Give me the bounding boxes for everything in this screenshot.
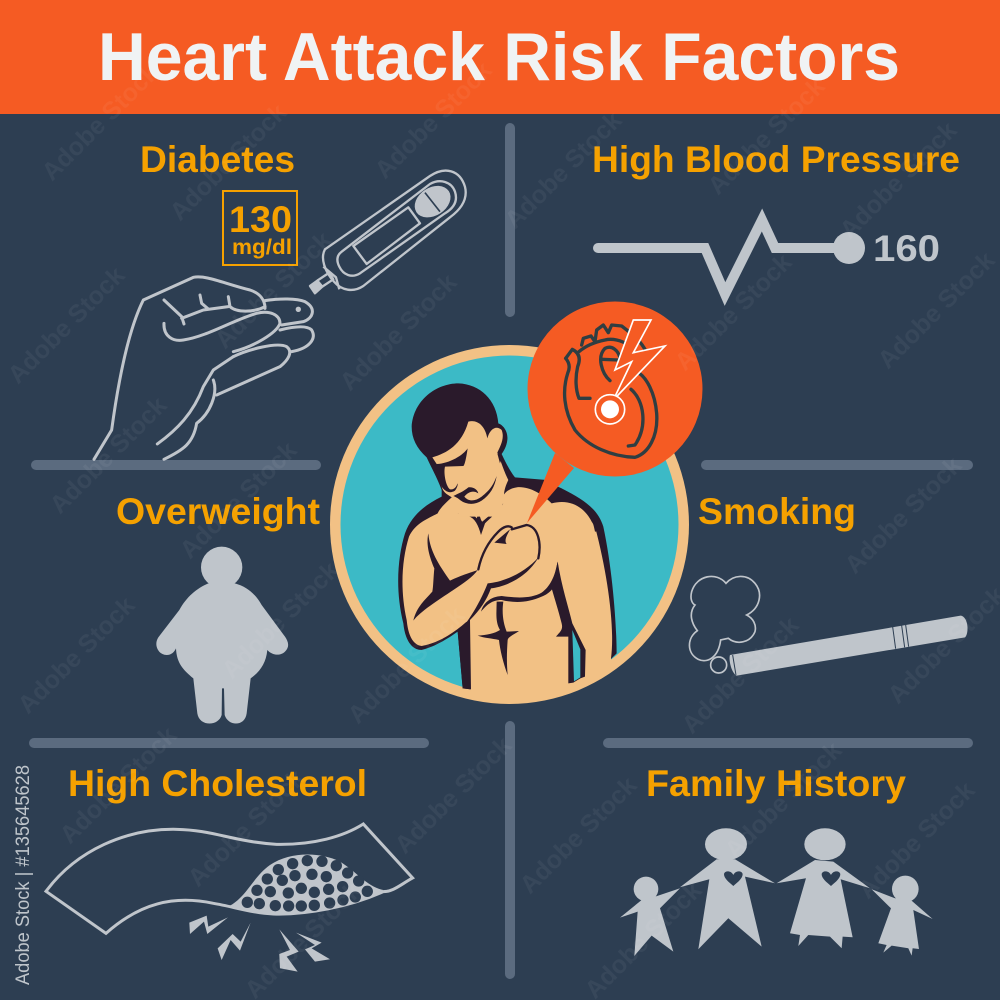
- shoulder notch: [592, 523, 596, 532]
- watermark pattern: Adobe Stock: [36, 58, 164, 186]
- icon: artery with plaque: [46, 824, 413, 972]
- heading: family history: Family History: [646, 763, 906, 804]
- watermark pattern: Adobe Stock: [342, 601, 470, 729]
- face profile: [432, 458, 458, 492]
- reading box: 130 mg/dl: mg/dl: [232, 236, 292, 259]
- icon: glucose meter: [310, 171, 466, 293]
- title banner: Heart Attack Risk Factors: [98, 19, 900, 95]
- forearm lower shadow: [458, 557, 539, 689]
- watermark pattern: Adobe Stock: [164, 98, 292, 226]
- watermark pattern: Adobe Stock: [872, 246, 1000, 374]
- watermark pattern: Adobe Stock: [54, 721, 182, 849]
- watermark pattern: Adobe Stock: [2, 261, 130, 389]
- watermark pattern: Adobe Stock: [499, 106, 627, 234]
- watermark pattern: Adobe Stock: [389, 731, 517, 859]
- right flank shadow: [552, 562, 586, 683]
- gap between torso and arm: [572, 630, 580, 681]
- chest mark: [458, 503, 503, 535]
- icon: hand with finger: [94, 277, 313, 459]
- watermark pattern: Adobe Stock: [669, 248, 797, 376]
- watermark pattern: Adobe Stock: [12, 591, 140, 719]
- heading: high cholesterol: High Cholesterol: [68, 763, 367, 804]
- icon: lightning bolt: [613, 320, 665, 400]
- icon: cigarette and smoke: [689, 576, 968, 676]
- heading: high blood pressure: High Blood Pressure: [592, 139, 960, 180]
- panel: high blood pressure: [592, 139, 960, 294]
- heading: overweight: Overweight: [116, 491, 320, 532]
- heading: smoking: Smoking: [698, 491, 856, 532]
- stock credit: Adobe Stock | #135645628: [13, 765, 34, 985]
- panel: smoking: [689, 491, 968, 676]
- chart: pressure pulse line: [598, 220, 865, 294]
- watermark pattern: Adobe Stock: [216, 556, 344, 684]
- icon: pain bolts: [189, 916, 330, 972]
- watermark pattern: Adobe Stock: [839, 451, 967, 579]
- watermark pattern: Adobe Stock: [834, 116, 962, 244]
- callout: heart attack bubble: [527, 302, 702, 523]
- pectoral line: [481, 562, 559, 612]
- title banner: [0, 0, 1000, 114]
- watermark pattern: Adobe Stock: [44, 391, 172, 519]
- icon: overweight person: [156, 547, 288, 724]
- watermark pattern: Adobe Stock: [182, 764, 310, 892]
- panel: high cholesterol: [46, 763, 413, 972]
- watermark pattern: Adobe Stock: [702, 72, 830, 200]
- reading box: 130 mg/dl: [223, 191, 297, 265]
- head: [428, 421, 508, 517]
- watermark pattern: Adobe Stock: [174, 436, 302, 564]
- watermark pattern: Adobe Stock: [209, 226, 337, 354]
- panel: overweight: [116, 491, 320, 724]
- ear shadow: [497, 453, 502, 463]
- abdomen cross: [478, 602, 519, 675]
- icon: family figures: [620, 828, 933, 956]
- fist outline: [478, 525, 540, 569]
- heading: diabetes: Diabetes: [140, 139, 295, 180]
- panel: diabetes: [94, 139, 466, 459]
- value: 160: 160: [873, 228, 940, 269]
- hair and head backing: [412, 383, 544, 490]
- reading box: 130 mg/dl: 130: [229, 199, 292, 240]
- watermark pattern: Adobe Stock: [514, 771, 642, 899]
- figure: man clutching chest: [398, 383, 617, 710]
- watermark pattern: Adobe Stock: [852, 776, 980, 904]
- chest wedge and forearm: [413, 533, 478, 621]
- face skin: [432, 421, 508, 517]
- panel: family history: [620, 763, 933, 956]
- watermark pattern: Adobe Stock: [334, 268, 462, 396]
- mouth and jaw: [453, 476, 497, 504]
- torso: [398, 480, 617, 710]
- torso outline: [398, 480, 617, 689]
- center medallion: man with chest pain: [330, 302, 702, 710]
- icon: anatomical heart: [565, 320, 665, 457]
- icon: target dot: [595, 395, 625, 424]
- watermark pattern: Adobe Stock: [369, 56, 497, 184]
- torso skin: [402, 487, 612, 710]
- eye shadow: [437, 448, 468, 467]
- watermark pattern: Adobe Stock: [719, 736, 847, 864]
- watermark pattern: Adobe Stock: [676, 611, 804, 739]
